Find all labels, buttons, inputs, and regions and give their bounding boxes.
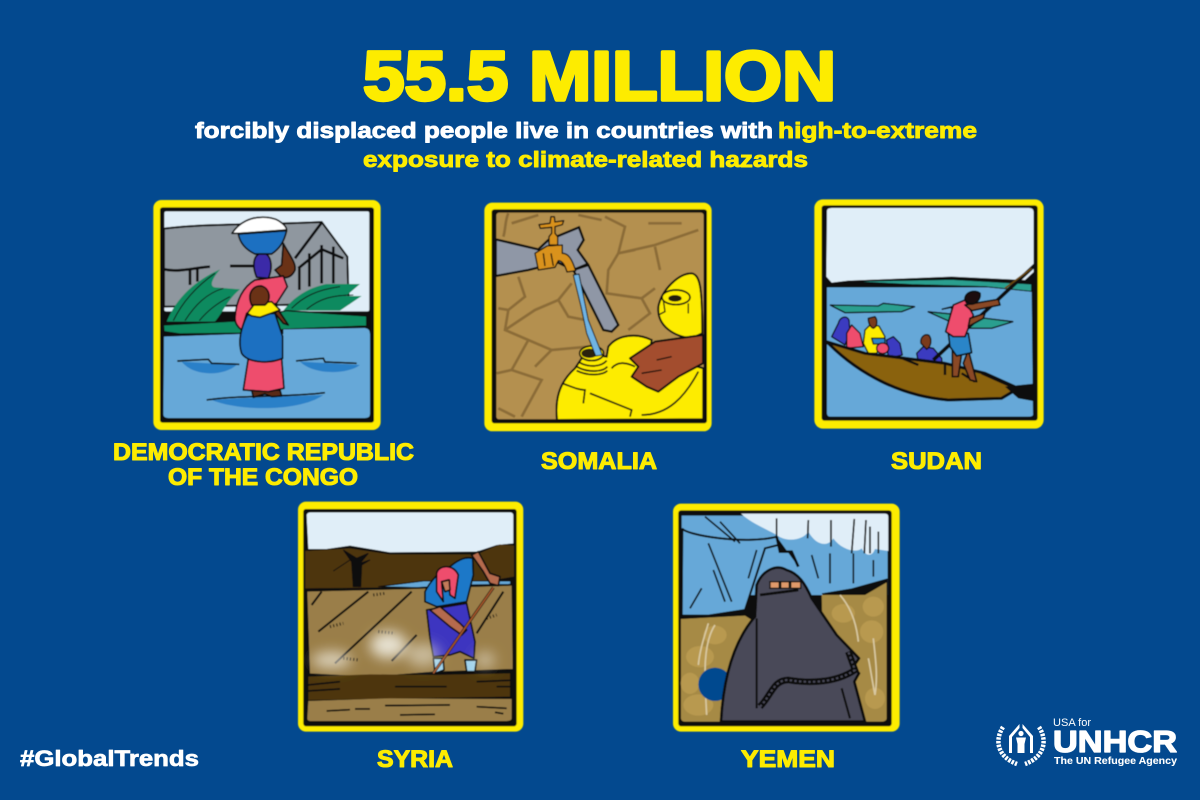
panel: Sudan illustration — [814, 199, 1044, 429]
hashtag: #GlobalTrends — [20, 746, 199, 771]
label: Democratic Republic of the Congo: DEMOCRATIC REPUBLIC — [113, 439, 414, 466]
passengers — [832, 317, 943, 373]
subtitle: exposure to climate-related hazards — [363, 147, 808, 172]
icon: UNHCR emblem — [998, 724, 1044, 764]
label: Democratic Republic of the Congo: OF THE CONGO — [168, 464, 358, 491]
subtitle — [195, 118, 977, 172]
logo: USA for UNHCR: UNHCR — [1053, 724, 1177, 759]
blue dot — [698, 668, 732, 701]
panel: Democratic Republic of the Congo illustration — [153, 200, 381, 430]
hand — [630, 335, 703, 392]
label: Somalia: SOMALIA — [541, 448, 657, 475]
label: Syria: SYRIA — [377, 746, 453, 773]
tent — [164, 222, 349, 307]
woman in niqab — [721, 568, 865, 722]
tap — [535, 217, 576, 272]
bank — [163, 311, 367, 334]
panel: Somalia illustration — [484, 203, 712, 431]
stony ground — [681, 616, 765, 722]
subtitle: high-to-extreme — [778, 118, 977, 143]
subtitle: forcibly displaced people live in countries with — [195, 118, 773, 143]
logo: USA for UNHCR: USA for — [1053, 717, 1091, 729]
cracked earth — [497, 213, 698, 417]
panel: Syria illustration — [298, 502, 523, 732]
label: Yemen: YEMEN — [741, 746, 835, 773]
water stream — [573, 274, 602, 356]
boatman — [933, 265, 1035, 360]
water — [163, 328, 370, 418]
river — [378, 581, 511, 588]
label: Sudan: SUDAN — [891, 448, 982, 475]
boat — [826, 342, 1018, 400]
title: 55.5 MILLION — [363, 37, 836, 115]
jerrycan — [556, 336, 703, 420]
field — [307, 586, 513, 677]
panel: Yemen illustration — [673, 504, 900, 732]
furrows — [308, 673, 510, 700]
logo: USA for UNHCR — [998, 717, 1177, 767]
reeds — [167, 269, 240, 322]
dust haze — [312, 632, 495, 668]
farmer — [425, 552, 500, 673]
lone tree — [333, 550, 370, 587]
pipe — [573, 265, 618, 332]
woman carrying bowl and child — [232, 217, 295, 397]
logo: USA for UNHCR: The UN Refugee Agency — [1054, 755, 1177, 767]
label: Democratic Republic of the Congo — [113, 439, 414, 491]
can cap — [658, 273, 702, 338]
